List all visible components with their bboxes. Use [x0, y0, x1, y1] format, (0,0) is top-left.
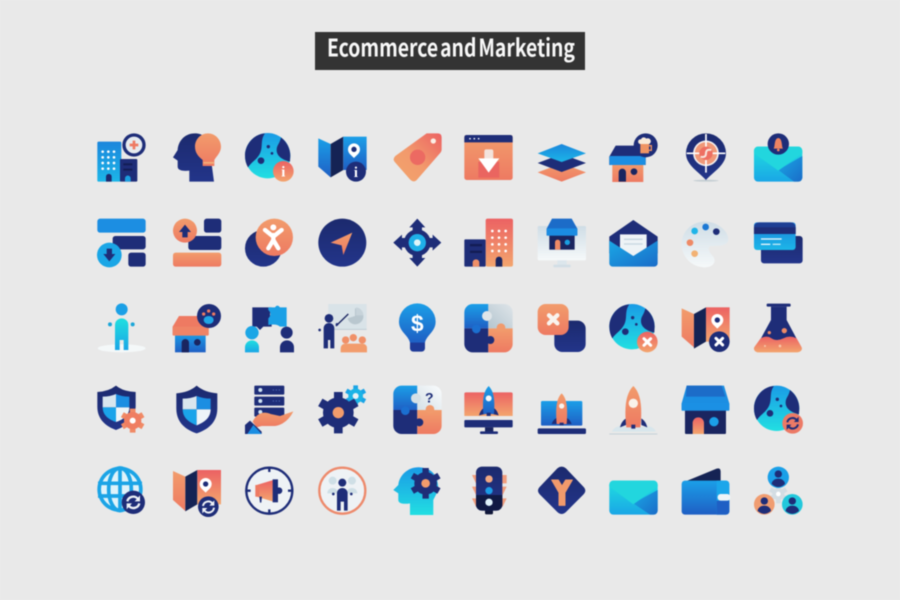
icon: megaphone target — [245, 467, 293, 515]
icon: monitor with rocket — [464, 386, 513, 434]
icon: location target pin — [686, 133, 726, 182]
icon: list with down arrow badge — [97, 219, 146, 267]
icon: server in hand — [245, 386, 293, 434]
icon: navigation arrow — [318, 219, 366, 267]
icon: open envelope with letter — [609, 220, 658, 267]
icon: route sign diamond — [538, 467, 585, 514]
icon: presentation with audience — [318, 304, 367, 352]
icon: map with refresh — [173, 470, 221, 517]
icon: envelope with bell — [754, 133, 802, 182]
icon: storefront — [682, 386, 729, 434]
icon: team puzzle collaboration — [245, 306, 294, 352]
icon: puzzle pieces — [464, 304, 513, 352]
icon: chemistry flask — [754, 304, 802, 352]
icon: four-way arrows — [393, 219, 441, 267]
icon: globe with close badge — [609, 304, 658, 352]
icon: head with light bulb — [173, 133, 221, 182]
icon: light bulb with dollar: $ — [411, 311, 424, 337]
icon: stacked layers — [538, 144, 586, 182]
icon: laptop with rocket — [538, 393, 586, 434]
icon: accessibility person badge — [245, 219, 293, 267]
icon: standing person on platform — [98, 303, 146, 352]
icon: globe with info badge: i — [281, 165, 285, 181]
icon: globe with info badge — [245, 133, 294, 182]
icon: credit cards — [754, 222, 803, 263]
title — [315, 28, 585, 70]
icon: rocket launch — [609, 386, 657, 434]
icon: price tag — [394, 133, 442, 181]
icon: people network — [754, 467, 803, 515]
icon: settings gears — [320, 385, 365, 433]
icon: envelope — [609, 481, 658, 515]
icon: puzzle with question mark: ? — [425, 390, 434, 406]
icon: hospital building with plus — [97, 133, 146, 182]
icon: shield with gear — [97, 386, 143, 433]
icon: shop with beer mug — [609, 133, 658, 182]
icon: wallet — [682, 468, 730, 515]
icon: close squares — [538, 304, 586, 352]
icon: web globe with refresh — [97, 467, 145, 514]
icon: monitor with online shop — [538, 219, 586, 267]
icon: download from window — [464, 135, 513, 180]
icon: pet shop with paw — [173, 304, 221, 352]
icon: traffic light — [472, 467, 507, 514]
icon: map with info badge — [318, 137, 367, 182]
icon: map with close badge — [682, 307, 730, 352]
icon: paint palette — [682, 222, 728, 267]
icon: map with info badge: i — [354, 165, 358, 181]
icon: office buildings — [464, 219, 513, 267]
icon: globe with refresh badge — [754, 386, 803, 434]
icon: puzzle with question mark — [393, 386, 442, 434]
icon: list with up arrow badge — [173, 219, 221, 267]
icon: target audience person — [319, 468, 365, 514]
title: Ecommerce and Marketing — [327, 28, 575, 64]
icon: light bulb with dollar — [399, 303, 436, 352]
icon: head with gear — [393, 467, 439, 515]
icon: security shield — [176, 386, 217, 433]
